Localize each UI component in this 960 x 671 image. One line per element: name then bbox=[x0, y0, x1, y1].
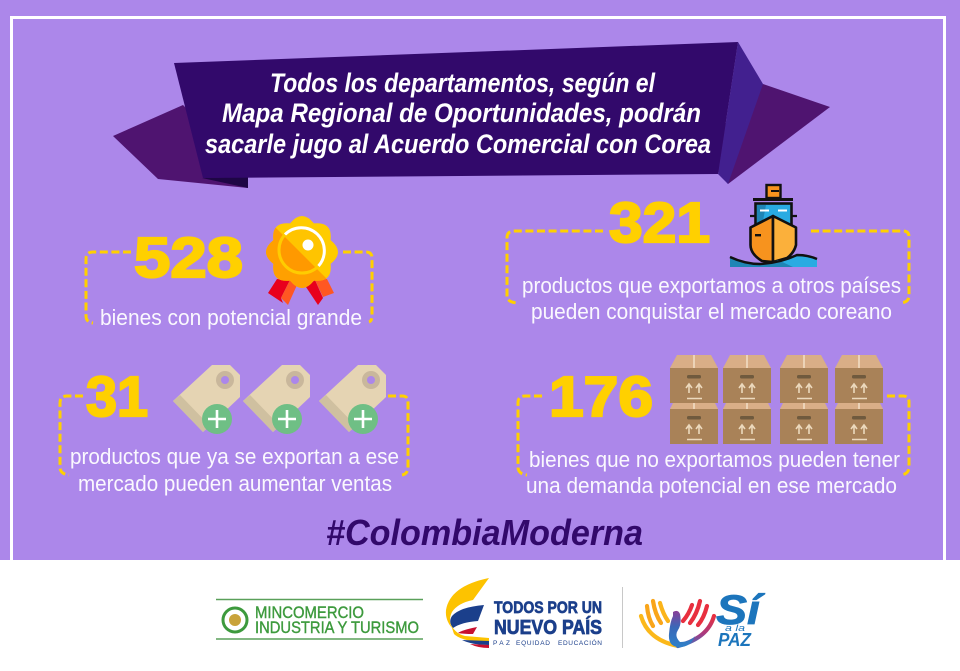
stat: 528 bbox=[86, 216, 372, 330]
title ribbon bbox=[113, 42, 830, 188]
caption: productos que ya se exportan a ese bbox=[70, 444, 399, 469]
icon: ship bbox=[730, 185, 817, 267]
logo: Todos por un nuevo país bbox=[446, 578, 602, 648]
caption: una demanda potencial en ese mercado bbox=[526, 473, 897, 498]
stat: 321 bbox=[507, 185, 909, 324]
stat: 31 bbox=[60, 365, 408, 496]
icon: boxes bbox=[670, 355, 883, 444]
title text: sacarle jugo al Acuerdo Comercial con Corea bbox=[205, 129, 711, 159]
hashtag: #ColombiaModerna bbox=[326, 512, 643, 553]
logo: Todos por un nuevo país: NUEVO PAÍS bbox=[494, 616, 602, 639]
title text: Mapa Regional de Oportunidades, podrán bbox=[222, 98, 701, 128]
stat: 176 bbox=[518, 355, 909, 498]
icon: price tags bbox=[173, 365, 386, 434]
logo: Mincomercio: MINCOMERCIO bbox=[255, 603, 364, 622]
title text: Todos los departamentos, según el bbox=[270, 68, 655, 98]
title text bbox=[205, 68, 711, 159]
caption: bienes que no exportamos pueden tener bbox=[529, 447, 900, 472]
white frame bbox=[12, 18, 944, 560]
divider bbox=[622, 587, 623, 648]
logo: Mincomercio: INDUSTRIA Y TURISMO bbox=[255, 618, 419, 637]
caption: pueden conquistar el mercado coreano bbox=[531, 299, 892, 324]
logo: Sí a la paz bbox=[641, 586, 766, 650]
caption bbox=[526, 447, 900, 498]
caption: bienes con potencial grande bbox=[100, 305, 362, 330]
caption: mercado pueden aumentar ventas bbox=[78, 471, 392, 496]
logo: Sí a la paz: Sí bbox=[716, 586, 766, 633]
caption bbox=[70, 444, 399, 496]
caption: productos que exportamos a otros países bbox=[522, 273, 901, 298]
logo: Todos por un nuevo país: EQUIDAD bbox=[516, 640, 550, 647]
number 176: 176 bbox=[549, 365, 653, 429]
logo: Mincomercio bbox=[216, 600, 423, 639]
number 528: 528 bbox=[134, 226, 243, 290]
number 31: 31 bbox=[86, 365, 148, 429]
logo: Todos por un nuevo país: PAZ bbox=[493, 640, 510, 647]
number 321: 321 bbox=[609, 191, 710, 255]
logo: Sí a la paz: PAZ bbox=[718, 630, 752, 650]
icon: medal bbox=[266, 216, 338, 305]
logo: Sí a la paz: a la bbox=[725, 623, 745, 633]
caption bbox=[522, 273, 901, 324]
logo: Todos por un nuevo país: TODOS POR UN bbox=[494, 599, 602, 617]
footer band bbox=[0, 560, 960, 671]
logo: Todos por un nuevo país: EDUCACIÓN bbox=[558, 638, 602, 647]
